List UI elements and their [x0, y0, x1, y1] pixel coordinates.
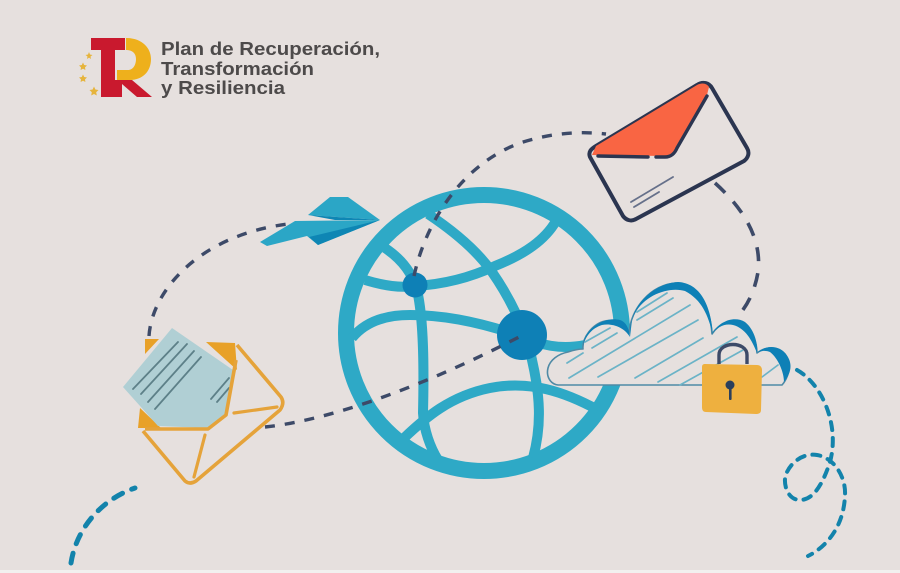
padlock: [702, 344, 762, 414]
icon: orange envelope: [589, 83, 748, 220]
logo: Plan de Recuperación: [79, 38, 380, 98]
icon: yellow envelope with letter: [123, 328, 283, 483]
envelope flap: [592, 84, 709, 156]
logo text: [161, 39, 380, 98]
cloud hatching: [567, 293, 778, 385]
globe node: large: [497, 310, 547, 360]
globe grid lines: [352, 214, 598, 460]
envelope fold lines: [194, 407, 277, 477]
icon: paper plane: [260, 197, 380, 246]
padlock keyhole: [726, 380, 734, 400]
padlock body: [702, 364, 762, 414]
envelope outline: [143, 345, 283, 483]
dashed path: orange envelope to cloud: [715, 183, 759, 316]
logo text: Plan de Recuperación,: [161, 39, 380, 59]
dashed path: letter to plane: [149, 224, 288, 336]
letter lines: [133, 342, 229, 409]
envelope side edge: [145, 360, 236, 429]
letter sheet: [123, 328, 233, 428]
envelope body: [589, 83, 748, 220]
dashed path: cloud loop: [785, 370, 845, 556]
icon: cloud: [547, 282, 791, 414]
globe node: small: [402, 272, 428, 298]
logo text: y Resiliencia: [161, 78, 286, 98]
cloud crescents: [583, 282, 791, 382]
icon: TR monogram: [79, 38, 152, 97]
cloud body: [547, 283, 789, 385]
icon: globe: [346, 195, 622, 471]
padlock shackle: [719, 344, 747, 364]
flap edge: [598, 96, 707, 157]
dashed path: bottom left: [71, 488, 135, 563]
envelope corners: [138, 339, 237, 428]
address lines: [631, 177, 673, 207]
logo text: Transformación: [161, 59, 314, 79]
dashed path: small node to orange envelope: [414, 133, 606, 276]
globe outer ring: [346, 195, 622, 471]
dashed path: yellow envelope to large node: [265, 336, 521, 427]
